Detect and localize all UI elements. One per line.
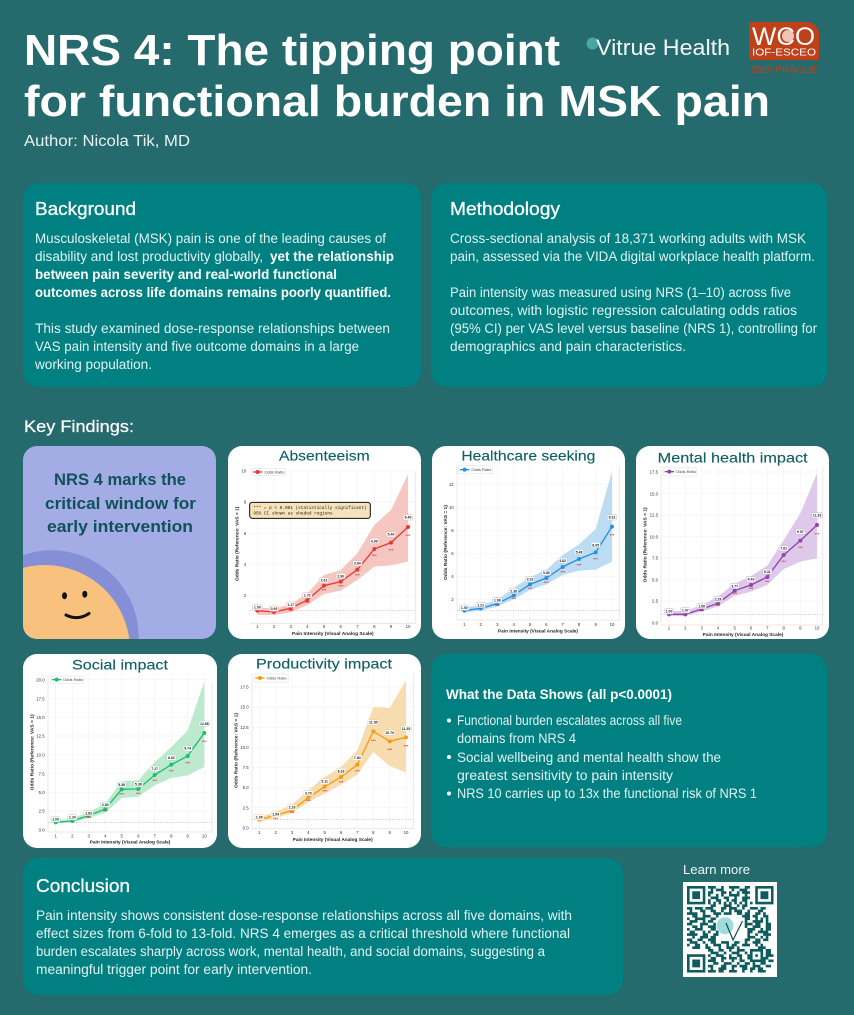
line chart: mental health impact odds ratios: 8 bbox=[782, 626, 785, 631]
line chart: healthcare seeking odds ratios: 12 bbox=[449, 482, 454, 487]
line chart: productivity impact odds ratios: 7.5 bbox=[243, 765, 249, 770]
line chart: absenteeism odds ratios: 10 bbox=[406, 624, 411, 629]
line chart: productivity impact odds ratios: *** bbox=[273, 816, 278, 821]
line chart: absenteeism odds ratios: 6.40 bbox=[405, 516, 411, 520]
callout text: early intervention bbox=[47, 517, 193, 536]
line chart: social impact odds ratios: 1.83 bbox=[85, 811, 92, 815]
line chart: healthcare seeking odds ratios: 1.66 bbox=[494, 599, 501, 603]
line chart: productivity impact odds ratios: 6.33 bbox=[338, 769, 344, 773]
line chart: healthcare seeking odds ratios: *** bbox=[610, 533, 615, 538]
line chart: healthcare seeking odds ratios: 4.82 bbox=[559, 559, 566, 563]
callout text: NRS 4 marks the bbox=[54, 470, 186, 489]
line chart: healthcare seeking odds ratios: 3.83 bbox=[543, 571, 550, 575]
significance note bbox=[250, 502, 370, 518]
line chart: social impact odds ratios: 12.5 bbox=[36, 734, 45, 739]
line chart: absenteeism odds ratios: Pain Intensity (Visual Analog Scale) bbox=[292, 631, 374, 637]
line chart: social impact odds ratios: 10 bbox=[202, 834, 207, 839]
line chart: absenteeism odds ratios: 7 bbox=[356, 624, 359, 629]
line chart: mental health impact odds ratios: Odds Ratio bbox=[676, 469, 697, 474]
line chart: mental health impact odds ratios: 7 bbox=[766, 626, 769, 631]
line chart: healthcare seeking odds ratios: 3 bbox=[496, 622, 499, 627]
line chart: mental health impact odds ratios: 1 bbox=[668, 626, 671, 631]
line chart: healthcare seeking odds ratios: 4 bbox=[451, 574, 454, 579]
line chart: social impact odds ratios: 3 bbox=[87, 834, 90, 839]
line chart: mental health impact odds ratios: *** bbox=[798, 545, 803, 550]
line chart: absenteeism odds ratios: *** bbox=[406, 533, 411, 538]
line chart: absenteeism odds ratios: 10 bbox=[242, 469, 247, 474]
line chart: productivity impact odds ratios: *** bbox=[306, 798, 311, 803]
text block: background body: outcomes across life domains remains poorly quantified. bbox=[35, 285, 391, 300]
line chart: productivity impact odds ratios: 12.5 bbox=[240, 725, 249, 730]
line chart: absenteeism odds ratios: Odds Ratio bbox=[264, 469, 285, 474]
line chart: healthcare seeking odds ratios: *** bbox=[577, 563, 582, 568]
text block: background body: yet the relationship bbox=[270, 249, 394, 264]
line chart: mental health impact odds ratios: Odds Ratio (Reference: VAS = 1) bbox=[643, 507, 649, 582]
line chart: healthcare seeking odds ratios: 8 bbox=[451, 528, 454, 533]
chart card: healthcare seeking bbox=[432, 446, 625, 639]
line chart: social impact odds ratios: *** bbox=[119, 791, 124, 796]
icon: smiling sun character bbox=[23, 550, 139, 639]
line chart: absenteeism odds ratios: 1 bbox=[256, 624, 259, 629]
line chart: healthcare seeking odds ratios: Odds Ratio (Reference: VAS = 1) bbox=[443, 505, 449, 580]
line chart: absenteeism odds ratios: 6 bbox=[244, 531, 247, 536]
line chart: mental health impact odds ratios: 1.07 bbox=[682, 609, 689, 613]
line chart: absenteeism odds ratios: 8 bbox=[244, 500, 247, 505]
line chart: social impact odds ratios: 7.27 bbox=[151, 767, 158, 771]
line chart: mental health impact odds ratios: 10 bbox=[815, 626, 820, 631]
line chart: productivity impact odds ratios: 11.35 bbox=[402, 727, 410, 731]
line chart: healthcare seeking odds ratios: 1 bbox=[463, 622, 466, 627]
line chart: mental health impact odds ratios: *** bbox=[732, 591, 737, 596]
line chart: productivity impact odds ratios: Odds Ratio (Reference: VAS = 1) bbox=[234, 713, 240, 788]
text block: background body: between pain severity and real-world functional bbox=[35, 267, 337, 282]
text block: methodology body: outcomes, with logistic regression calculating odds ratios bbox=[450, 303, 797, 318]
line chart: productivity impact odds ratios: 2.5 bbox=[243, 805, 249, 810]
line chart: social impact odds ratios bbox=[30, 675, 212, 846]
line chart: healthcare seeking odds ratios: 9 bbox=[594, 622, 597, 627]
line chart: productivity impact odds ratios: 6 bbox=[340, 830, 343, 835]
line chart: social impact odds ratios: 4 bbox=[104, 834, 107, 839]
text block: background body: disability and lost productivity globally, bbox=[35, 249, 263, 264]
chart title: healthcare seeking: Healthcare seeking bbox=[461, 448, 595, 464]
text block: methodology body: Cross-sectional analysis of 18,371 working adults with MSK bbox=[450, 231, 806, 246]
line chart: mental health impact odds ratios: 3.77 bbox=[731, 584, 738, 588]
line chart: absenteeism odds ratios: 8 bbox=[373, 624, 376, 629]
line chart: mental health impact odds ratios: 2.28 bbox=[715, 598, 721, 602]
line chart: absenteeism odds ratios: *** bbox=[389, 548, 394, 553]
line chart: mental health impact odds ratios: *** bbox=[716, 603, 721, 608]
line chart: healthcare seeking odds ratios bbox=[443, 466, 619, 634]
line chart: mental health impact odds ratios: 5.0 bbox=[652, 577, 659, 582]
line chart: healthcare seeking odds ratios: 7 bbox=[561, 622, 564, 627]
line chart: social impact odds ratios: 2 bbox=[71, 834, 74, 839]
panel: conclusion bbox=[23, 858, 623, 995]
line chart: mental health impact odds ratios: 7.81 bbox=[780, 547, 787, 551]
text block: background body: This study examined dose-response relationships between bbox=[35, 321, 390, 336]
line chart: social impact odds ratios: *** bbox=[86, 815, 91, 820]
line chart: mental health impact odds ratios bbox=[643, 467, 823, 638]
line chart: absenteeism odds ratios: 4 bbox=[244, 562, 247, 567]
line chart: absenteeism odds ratios: 1.00 bbox=[254, 606, 261, 610]
panel: methodology bbox=[431, 183, 827, 387]
line chart: mental health impact odds ratios: 2 bbox=[684, 626, 687, 631]
line chart: absenteeism odds ratios: *** bbox=[372, 553, 377, 558]
line chart: mental health impact odds ratios: 1.00 bbox=[666, 610, 672, 614]
line chart: healthcare seeking odds ratios: 10 bbox=[610, 622, 615, 627]
line chart: healthcare seeking odds ratios: 1.00 bbox=[461, 606, 468, 610]
chart title: productivity impact: Productivity impact bbox=[256, 656, 392, 672]
line chart: absenteeism odds ratios: 5 bbox=[323, 624, 326, 629]
line chart: productivity impact odds ratios: 7 bbox=[356, 830, 359, 835]
line chart: mental health impact odds ratios: 0.0 bbox=[652, 620, 659, 625]
line chart: absenteeism odds ratios bbox=[235, 468, 415, 637]
panel: NRS 4 callout bbox=[23, 446, 216, 639]
callout text: critical window for bbox=[45, 494, 196, 513]
line chart: mental health impact odds ratios: *** bbox=[781, 559, 786, 564]
line chart: mental health impact odds ratios: 5.31 bbox=[764, 570, 771, 574]
heading: methodology: Methodology bbox=[450, 199, 560, 219]
line chart: productivity impact odds ratios: 3 bbox=[291, 830, 294, 835]
heading: what the data shows: What the Data Shows (all p<0.0001) bbox=[446, 687, 672, 702]
line chart: productivity impact odds ratios: *** bbox=[355, 768, 360, 773]
line chart: productivity impact odds ratios bbox=[234, 674, 413, 843]
line chart: absenteeism odds ratios: Odds Ratio (Reference: VAS = 1) bbox=[235, 506, 241, 581]
line chart: productivity impact odds ratios: 10.70 bbox=[385, 731, 394, 735]
line chart: social impact odds ratios: 6 bbox=[137, 834, 140, 839]
line chart: healthcare seeking odds ratios: 6.05 bbox=[592, 543, 599, 547]
text block: conclusion body: effect sizes from 6-fold to 13-fold. NRS 4 emerges as a critical threshold where functional bbox=[36, 926, 570, 941]
line chart: social impact odds ratios: 1.00 bbox=[52, 818, 59, 822]
line chart: social impact odds ratios: *** bbox=[136, 791, 141, 796]
chart card: social impact bbox=[23, 654, 217, 848]
line chart: healthcare seeking odds ratios: 3.33 bbox=[527, 578, 533, 582]
line chart: productivity impact odds ratios: 10 bbox=[404, 830, 409, 835]
title: NRS 4: The tipping point bbox=[24, 26, 560, 75]
text block: background body: Musculoskeletal (MSK) pain is one of the leading causes of bbox=[35, 231, 386, 246]
text block: methodology body: pain, assessed via the VIDA digital workplace health platform. bbox=[450, 249, 815, 264]
line chart: social impact odds ratios: 8.62 bbox=[168, 756, 175, 760]
text block: background body: working population. bbox=[34, 357, 152, 372]
text block: conclusion body: Pain intensity shows consistent dose-response relationships across all five domains, with bbox=[36, 908, 572, 923]
text block: conclusion body: burden escalates sharply across work, mental health, and social domains, suggesting a bbox=[36, 944, 546, 959]
line chart: healthcare seeking odds ratios: *** bbox=[511, 596, 516, 601]
line chart: absenteeism odds ratios: 0.93 bbox=[271, 607, 277, 611]
bullet list: Functional burden escalates across all five bbox=[457, 713, 682, 728]
significance note: 95% CI shown as shaded regions bbox=[253, 511, 333, 516]
bullet list bbox=[447, 713, 757, 801]
line chart: productivity impact odds ratios: 1 bbox=[258, 830, 261, 835]
line chart: productivity impact odds ratios: *** bbox=[290, 810, 295, 815]
line chart: mental health impact odds ratios: 1.56 bbox=[698, 604, 705, 608]
line chart: mental health impact odds ratios: 15.0 bbox=[650, 491, 659, 496]
line chart: healthcare seeking odds ratios: *** bbox=[593, 557, 598, 562]
line chart: productivity impact odds ratios: 2 bbox=[274, 830, 277, 835]
line chart: social impact odds ratios: 9 bbox=[186, 834, 189, 839]
line chart: social impact odds ratios: 9.74 bbox=[184, 747, 191, 751]
chart title: mental health impact: Mental health impact bbox=[658, 449, 808, 465]
logo: WCO IOF-ESCEO 2026 Prague bbox=[749, 22, 819, 76]
line chart: productivity impact odds ratios: 5.11 bbox=[321, 780, 328, 784]
line chart: healthcare seeking odds ratios: *** bbox=[495, 603, 500, 608]
line chart: healthcare seeking odds ratios: 6 bbox=[451, 551, 454, 556]
line chart: absenteeism odds ratios: *** bbox=[288, 608, 293, 613]
line chart: productivity impact odds ratios: 0.0 bbox=[243, 825, 249, 830]
title bbox=[24, 26, 770, 126]
line chart: mental health impact odds ratios: *** bbox=[765, 579, 770, 584]
line chart: social impact odds ratios: 7.5 bbox=[39, 771, 45, 776]
heading: conclusion: Conclusion bbox=[36, 876, 130, 896]
line chart: social impact odds ratios: *** bbox=[103, 809, 108, 814]
line chart: social impact odds ratios: 2.83 bbox=[102, 803, 109, 807]
line chart: social impact odds ratios: 17.5 bbox=[36, 696, 45, 701]
line chart: absenteeism odds ratios: 1.17 bbox=[287, 603, 294, 607]
text block: methodology body: Pain intensity was measured using NRS (1–10) across five bbox=[450, 285, 791, 300]
panel: what the data shows bbox=[431, 654, 827, 847]
line chart: social impact odds ratios: 5.38 bbox=[135, 783, 142, 787]
chart title: social impact: Social impact bbox=[72, 657, 168, 673]
logo: WCO IOF-ESCEO 2026 Prague: IOF-ESCEO bbox=[752, 46, 816, 58]
line chart: productivity impact odds ratios: 7.84 bbox=[354, 756, 361, 760]
line chart: social impact odds ratios: 5.36 bbox=[118, 783, 125, 787]
line chart: healthcare seeking odds ratios: 8.31 bbox=[609, 516, 615, 520]
line chart: social impact odds ratios: 10.0 bbox=[36, 752, 45, 757]
bullet list: Social wellbeing and mental health show the bbox=[457, 750, 721, 765]
line chart: productivity impact odds ratios: Odds Ratio bbox=[267, 675, 287, 680]
chart title: absenteeism: Absenteeism bbox=[279, 448, 370, 464]
logo: WCO IOF-ESCEO 2026 Prague: 2026 PRAGUE bbox=[750, 65, 818, 76]
line chart: productivity impact odds ratios: 17.5 bbox=[240, 685, 249, 690]
chart card: absenteeism bbox=[228, 446, 421, 639]
line chart: social impact odds ratios: 20.0 bbox=[36, 677, 45, 682]
logo: WCO IOF-ESCEO 2026 Prague: WCO bbox=[752, 23, 815, 51]
line chart: social impact odds ratios: 0.0 bbox=[39, 827, 45, 832]
text block: background body: VAS pain intensity and five outcome domains in a large bbox=[35, 339, 359, 354]
line chart: absenteeism odds ratios: 9 bbox=[390, 624, 393, 629]
heading: key findings: Key Findings: bbox=[24, 417, 134, 436]
line chart: social impact odds ratios: 2.5 bbox=[39, 809, 45, 814]
line chart: social impact odds ratios: 15.0 bbox=[36, 715, 45, 720]
line chart: social impact odds ratios: 1 bbox=[54, 834, 57, 839]
bullet list: NRS 10 carries up to 13x the functional risk of NRS 1 bbox=[457, 786, 757, 801]
line chart: social impact odds ratios: 5.0 bbox=[39, 790, 45, 795]
text block: conclusion body bbox=[36, 908, 572, 977]
text block: methodology body: (95% CI) per VAS level versus baseline (NRS 1), controlling for bbox=[450, 321, 818, 336]
line chart: social impact odds ratios: 1.24 bbox=[69, 816, 76, 820]
line chart: mental health impact odds ratios: *** bbox=[749, 586, 754, 591]
line chart: productivity impact odds ratios: 15.0 bbox=[240, 705, 249, 710]
line chart: healthcare seeking odds ratios: 5 bbox=[529, 622, 532, 627]
line chart: absenteeism odds ratios: 1.72 bbox=[304, 594, 311, 598]
line chart: absenteeism odds ratios: *** bbox=[305, 600, 310, 605]
callout text bbox=[45, 470, 196, 536]
line chart: healthcare seeking odds ratios: 1.21 bbox=[477, 603, 484, 607]
line chart: mental health impact odds ratios: *** bbox=[699, 609, 704, 614]
text block: background body bbox=[34, 231, 394, 372]
line chart: absenteeism odds ratios: *** bbox=[338, 584, 343, 589]
line chart: productivity impact odds ratios: *** bbox=[371, 738, 376, 743]
line chart: productivity impact odds ratios: Pain Intensity (Visual Analog Scale) bbox=[293, 837, 373, 843]
line chart: absenteeism odds ratios: 2.90 bbox=[337, 574, 344, 578]
line chart: mental health impact odds ratios: 17.5 bbox=[650, 470, 659, 475]
line chart: social impact odds ratios: *** bbox=[152, 778, 157, 783]
text block: conclusion body: meaningful trigger point for early intervention. bbox=[36, 962, 312, 977]
QR code bbox=[683, 882, 777, 977]
line chart: productivity impact odds ratios: 1.54 bbox=[272, 813, 279, 817]
line chart: social impact odds ratios: *** bbox=[169, 768, 174, 773]
line chart: mental health impact odds ratios: *** bbox=[815, 531, 820, 536]
line chart: productivity impact odds ratios: *** bbox=[387, 747, 392, 752]
line chart: absenteeism odds ratios: 5.40 bbox=[388, 533, 394, 537]
label: learn more: Learn more bbox=[683, 862, 750, 877]
line chart: mental health impact odds ratios: Pain Intensity (Visual Analog Scale) bbox=[703, 632, 784, 638]
line chart: absenteeism odds ratios: 2 bbox=[273, 624, 276, 629]
line chart: productivity impact odds ratios: 9 bbox=[388, 830, 391, 835]
line chart: productivity impact odds ratios: *** bbox=[404, 743, 409, 748]
line chart: productivity impact odds ratios: 2.16 bbox=[289, 806, 295, 810]
line chart: mental health impact odds ratios: 2.5 bbox=[652, 599, 659, 604]
line chart: absenteeism odds ratios: *** bbox=[322, 587, 327, 592]
line chart: mental health impact odds ratios: 6 bbox=[750, 626, 753, 631]
line chart: healthcare seeking odds ratios: 2 bbox=[479, 622, 482, 627]
line chart: healthcare seeking odds ratios: 5.48 bbox=[576, 550, 582, 554]
line chart: absenteeism odds ratios: *** bbox=[355, 573, 360, 578]
line chart: absenteeism odds ratios: 3 bbox=[289, 624, 292, 629]
line chart: absenteeism odds ratios: 4 bbox=[306, 624, 309, 629]
line chart: healthcare seeking odds ratios: Odds Ratio bbox=[471, 467, 492, 472]
line chart: mental health impact odds ratios: 9.57 bbox=[797, 530, 804, 534]
line chart: social impact odds ratios: *** bbox=[202, 739, 207, 744]
logo: Vitrue Health: Vitrue Health bbox=[596, 35, 730, 60]
line chart: productivity impact odds ratios: 10.0 bbox=[240, 745, 249, 750]
line chart: healthcare seeking odds ratios: 2 bbox=[451, 597, 454, 602]
line chart: social impact odds ratios: 12.86 bbox=[200, 722, 209, 726]
line chart: absenteeism odds ratios: 3.64 bbox=[354, 562, 361, 566]
line chart: productivity impact odds ratios: 5 bbox=[323, 830, 326, 835]
line chart: social impact odds ratios: 8 bbox=[170, 834, 173, 839]
text block: methodology body: demographics and pain characteristics. bbox=[450, 339, 686, 354]
line chart: productivity impact odds ratios: *** bbox=[322, 788, 327, 793]
line chart: mental health impact odds ratios: 7.5 bbox=[652, 556, 659, 561]
line chart: healthcare seeking odds ratios: 10 bbox=[449, 505, 454, 510]
line chart: mental health impact odds ratios: 11.33 bbox=[813, 514, 821, 518]
line chart: social impact odds ratios: Odds Ratio (Reference: VAS = 1) bbox=[30, 714, 36, 790]
chart card: mental health impact bbox=[636, 446, 829, 639]
line chart: productivity impact odds ratios: 11.95 bbox=[369, 721, 378, 725]
line chart: healthcare seeking odds ratios: 2.38 bbox=[510, 589, 517, 593]
line chart: productivity impact odds ratios: *** bbox=[339, 780, 344, 785]
line chart: mental health impact odds ratios: 5 bbox=[733, 626, 736, 631]
line chart: social impact odds ratios: Pain Intensity (Visual Analog Scale) bbox=[90, 840, 171, 846]
line chart: mental health impact odds ratios: 9 bbox=[799, 626, 802, 631]
title: for functional burden in MSK pain bbox=[24, 77, 770, 126]
line chart: healthcare seeking odds ratios: *** bbox=[560, 570, 565, 575]
line chart: healthcare seeking odds ratios: 4 bbox=[512, 622, 515, 627]
line chart: absenteeism odds ratios: 2 bbox=[244, 593, 247, 598]
line chart: absenteeism odds ratios: 2.61 bbox=[321, 579, 327, 583]
heading: background: Background bbox=[35, 199, 136, 219]
line chart: healthcare seeking odds ratios: *** bbox=[528, 586, 533, 591]
line chart: mental health impact odds ratios: 12.5 bbox=[650, 513, 659, 518]
line chart: productivity impact odds ratios: 8 bbox=[372, 830, 375, 835]
line chart: healthcare seeking odds ratios: *** bbox=[544, 580, 549, 585]
line chart: productivity impact odds ratios: 4 bbox=[307, 830, 310, 835]
bullet list: greatest sensitivity to pain intensity bbox=[457, 768, 673, 783]
bullet list: domains from NRS 4 bbox=[457, 731, 577, 746]
line chart: mental health impact odds ratios: 10.0 bbox=[650, 534, 659, 539]
line chart: productivity impact odds ratios: 1.00 bbox=[256, 816, 263, 820]
line chart: healthcare seeking odds ratios: Pain Intensity (Visual Analog Scale) bbox=[498, 628, 578, 634]
text block: methodology body bbox=[450, 231, 818, 354]
line chart: absenteeism odds ratios: 6 bbox=[339, 624, 342, 629]
line chart: social impact odds ratios: 5 bbox=[120, 834, 123, 839]
line chart: healthcare seeking odds ratios: 8 bbox=[578, 622, 581, 627]
panel: background bbox=[23, 183, 421, 387]
line chart: absenteeism odds ratios: 4.99 bbox=[371, 539, 378, 543]
line chart: mental health impact odds ratios: 4.43 bbox=[748, 578, 754, 582]
line chart: productivity impact odds ratios: 5.0 bbox=[243, 785, 249, 790]
line chart: healthcare seeking odds ratios: 6 bbox=[545, 622, 548, 627]
line chart: social impact odds ratios: Odds Ratio bbox=[63, 677, 84, 682]
author: Author: Nicola Tik, MD bbox=[24, 133, 190, 150]
line chart: mental health impact odds ratios: 4 bbox=[717, 626, 720, 631]
line chart: social impact odds ratios: 7 bbox=[153, 834, 156, 839]
chart card: productivity impact bbox=[228, 654, 421, 848]
line chart: social impact odds ratios: *** bbox=[185, 761, 190, 766]
line chart: productivity impact odds ratios: 3.70 bbox=[305, 791, 312, 795]
significance note: *** = p < 0.001 (statistically significant) bbox=[253, 506, 367, 511]
line chart: mental health impact odds ratios: 3 bbox=[700, 626, 703, 631]
